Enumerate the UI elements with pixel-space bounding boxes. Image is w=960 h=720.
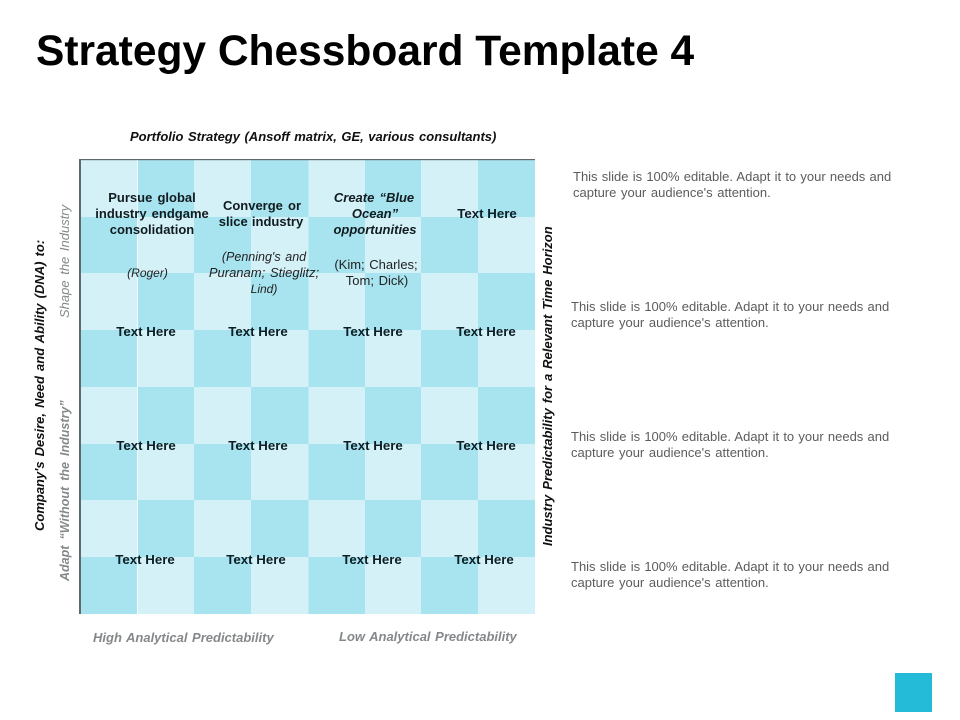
left axis heading: Company's Desire, Need and Ability (DNA) to: [32, 240, 47, 531]
cell labels row 2 [116, 324, 516, 339]
cell: converge: Puranam; Stieglitz; [209, 265, 320, 280]
description 4 [571, 559, 889, 590]
cell labels row 2: Text Here [228, 324, 288, 339]
cell: blue ocean: (Kim; Charles; [334, 257, 418, 272]
description 2: This slide is 100% editable. Adapt it to your needs and [571, 299, 889, 314]
cell labels row 4: Text Here [226, 552, 286, 567]
cell labels row 3: Text Here [228, 438, 288, 453]
description 3: capture your audience's attention. [571, 445, 769, 460]
top axis heading: Portfolio Strategy (Ansoff matrix, GE, various consultants) [130, 129, 496, 144]
cell: converge [209, 198, 320, 296]
cell: blue ocean: Tom; Dick) [346, 273, 408, 288]
description 1 [573, 169, 891, 200]
cell: converge: Lind) [251, 282, 277, 296]
cell: blue ocean: Create “Blue [334, 190, 414, 205]
bottom label: high predictability: High Analytical Predictability [93, 630, 274, 645]
cell labels row 2: Text Here [343, 324, 403, 339]
cell labels row 3: Text Here [456, 438, 516, 453]
description 3 [571, 429, 889, 460]
cell: converge: slice industry [219, 214, 304, 229]
cell labels row 3: Text Here [116, 438, 176, 453]
cell labels row 2: Text Here [456, 324, 516, 339]
chessboard grid [79, 159, 535, 614]
cell: blue ocean [333, 190, 418, 288]
cell labels row 3 [116, 438, 516, 453]
cell labels row 4: Text Here [115, 552, 175, 567]
cell labels row 4 [115, 552, 514, 567]
cell: pursue global: industry endgame [95, 206, 209, 221]
cell: pursue global: (Roger) [127, 266, 168, 280]
description 4: capture your audience's attention. [571, 575, 769, 590]
cell labels row 4: Text Here [342, 552, 402, 567]
cell: converge: (Penning's and [222, 250, 307, 264]
bottom label: low predictability: Low Analytical Predictability [339, 629, 518, 644]
description 4: This slide is 100% editable. Adapt it to your needs and [571, 559, 889, 574]
cell: converge: Converge or [223, 198, 301, 213]
cell: blue ocean: Ocean” [352, 206, 399, 221]
left label: adapt without the industry: Adapt “Without the Industry” [58, 400, 72, 582]
right axis heading: Industry Predictability for a Relevant Time Horizon [540, 226, 555, 546]
cell labels row 3: Text Here [343, 438, 403, 453]
description 2: capture your audience's attention. [571, 315, 769, 330]
cell labels row 4: Text Here [454, 552, 514, 567]
cell labels row 2: Text Here [116, 324, 176, 339]
left label: shape the industry: Shape the Industry [57, 203, 72, 318]
description 1: capture your audience's attention. [573, 185, 771, 200]
description 3: This slide is 100% editable. Adapt it to your needs and [571, 429, 889, 444]
cell: blue ocean: opportunities [333, 222, 417, 237]
title: Strategy Chessboard Template 4 [36, 28, 695, 75]
cell: pursue global: consolidation [110, 222, 194, 237]
cell: pursue global [95, 190, 209, 280]
description 1: This slide is 100% editable. Adapt it to your needs and [573, 169, 891, 184]
corner square [895, 673, 932, 712]
cell: pursue global: Pursue global [108, 190, 196, 205]
cell labels row 1: Text Here [457, 206, 517, 221]
description 2 [571, 299, 889, 330]
